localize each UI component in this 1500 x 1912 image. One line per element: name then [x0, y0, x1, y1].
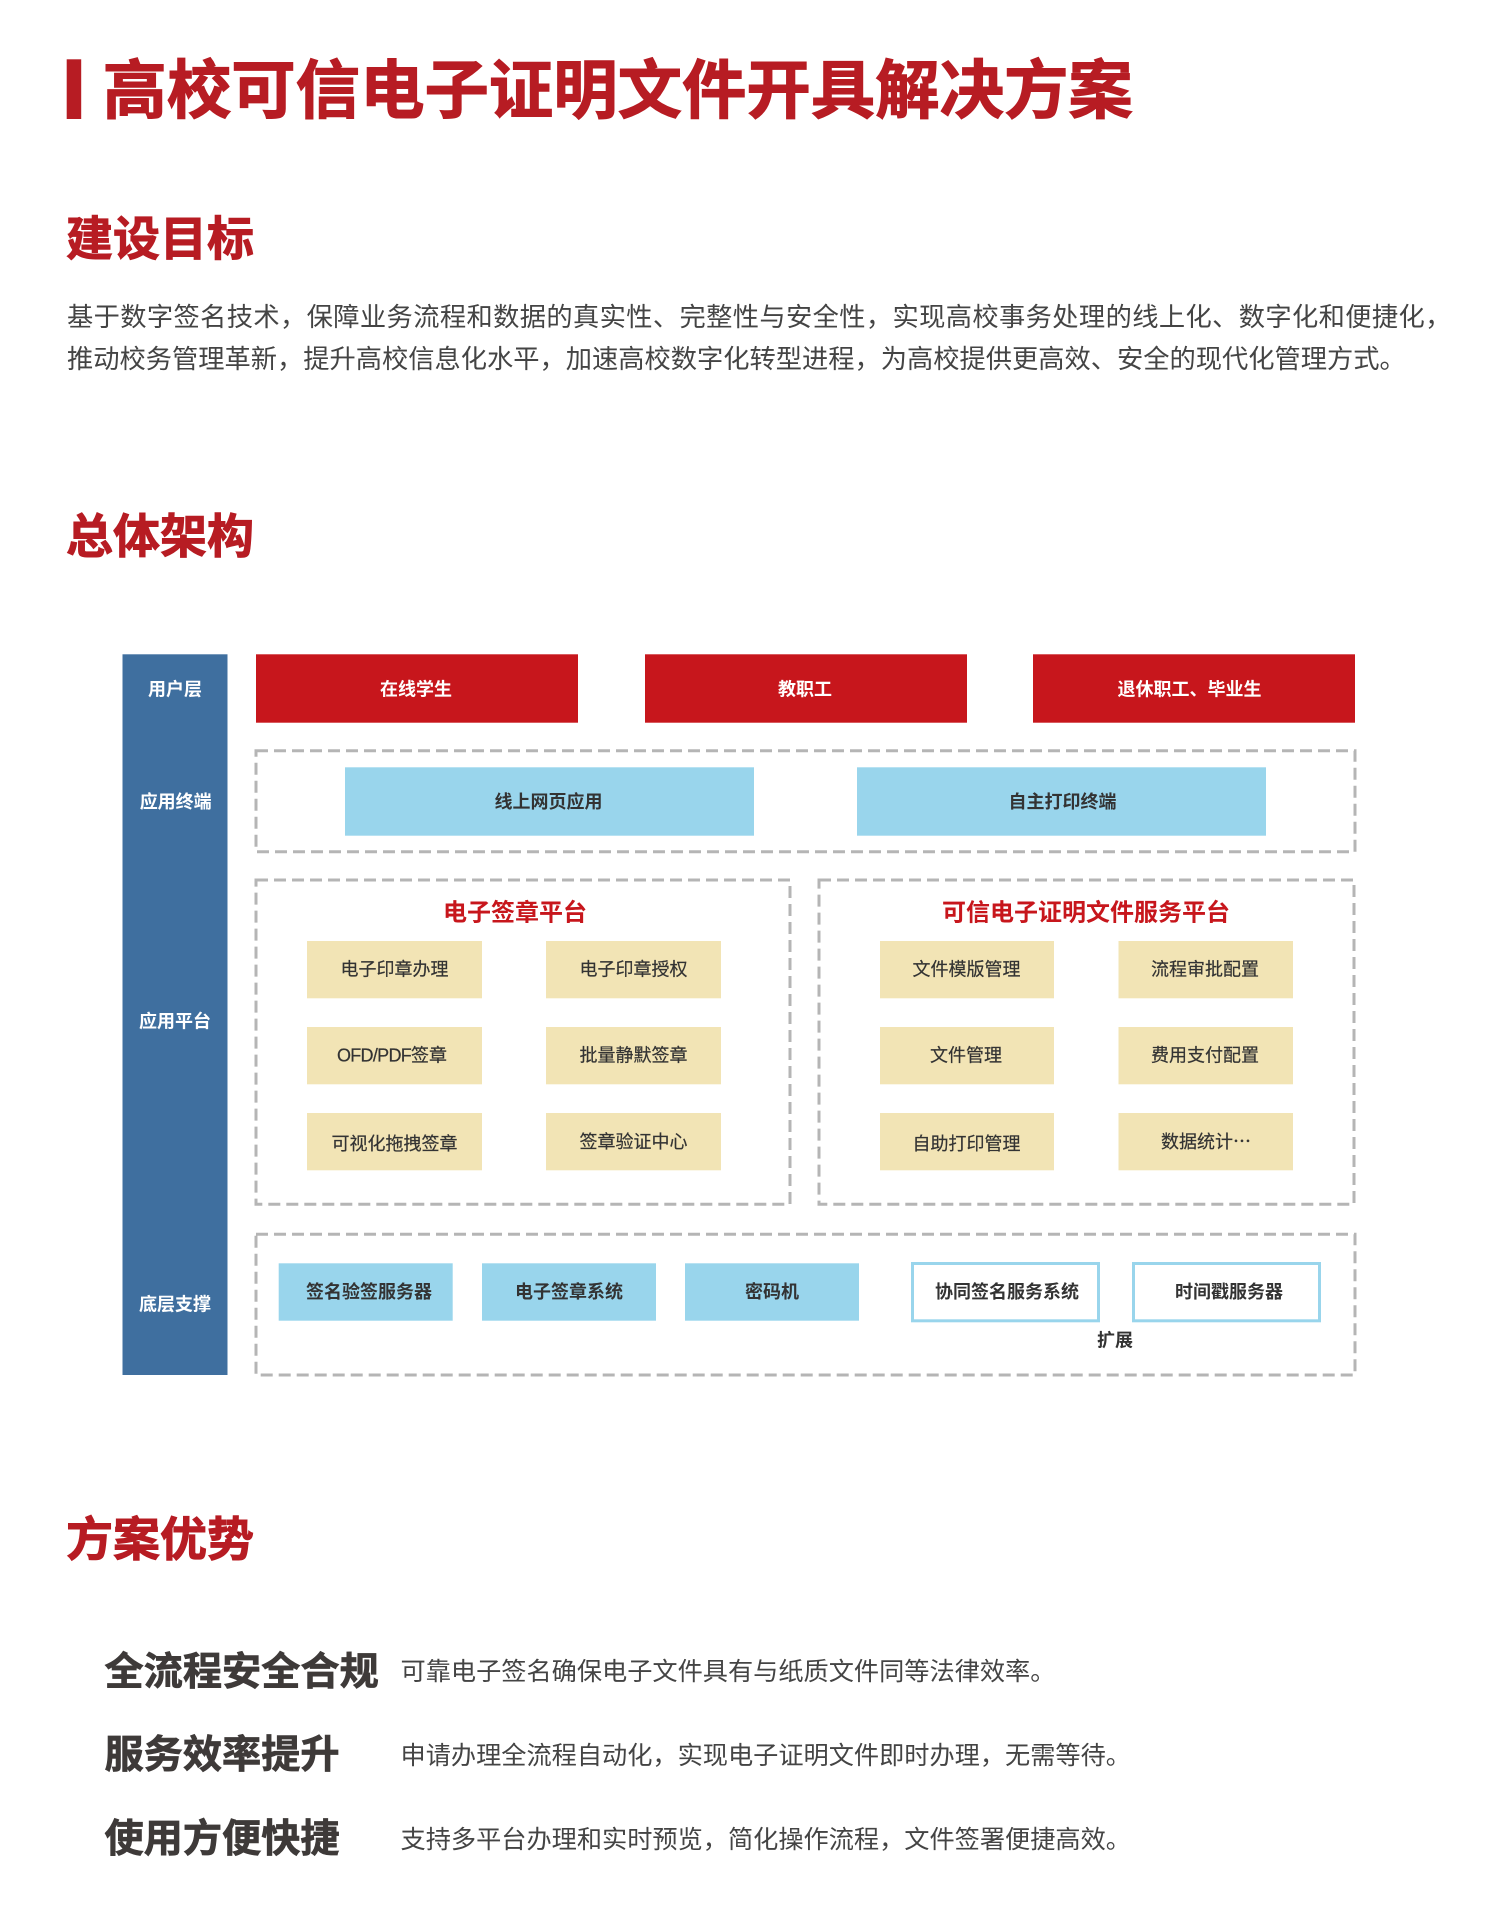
extension box: 时间戳服务器: 时间戳服务器 [1175, 1282, 1283, 1302]
item: 电子印章办理 [307, 941, 482, 998]
panel title: 可信电子证明文件服务平台 [942, 898, 1230, 926]
user box: 在线学生: 在线学生 [380, 678, 452, 700]
advantage: 全流程安全合规: 全流程安全合规 [104, 1651, 379, 1694]
user box: 教职工 [645, 654, 967, 723]
heading: 方案优势: 方案优势 [66, 1513, 254, 1566]
item: OFD/PDF签章 [307, 1027, 482, 1084]
item: 文件管理 [880, 1027, 1054, 1084]
user box: 退休职工、毕业生 [1033, 654, 1355, 723]
sidebar: layer labels: 应用终端 [140, 791, 212, 812]
item: 电子印章授权: 电子印章授权 [580, 960, 688, 980]
item: 费用支付配置 [1118, 1027, 1293, 1084]
item: 文件模版管理 [880, 941, 1054, 998]
panel: 可信电子证明文件服务平台 [819, 880, 1354, 1204]
advantage: 服务效率提升: 服务效率提升 [104, 1734, 340, 1777]
item: 批量静默签章 [546, 1027, 721, 1084]
text block: goals paragraph: 推动校务管理革新，提升高校信息化水平，加速高校数字化转型进程，为高校提供更高效、安全的现代化管理方式。 [67, 344, 1406, 374]
item: 文件模版管理: 文件模版管理 [912, 960, 1020, 980]
user box: 退休职工、毕业生: 退休职工、毕业生 [1118, 680, 1262, 700]
panel title: 电子签章平台 [443, 898, 587, 926]
sidebar: layer labels: 用户层 [148, 678, 202, 700]
terminal box: 自主打印终端: 自主打印终端 [1008, 792, 1116, 812]
advantage: 服务效率提升: 申请办理全流程自动化，实现电子证明文件即时办理，无需等待。 [400, 1742, 1131, 1770]
support box: 密码机: 密码机 [745, 1281, 799, 1302]
heading: 总体架构: 总体架构 [66, 510, 254, 563]
panel: 电子签章平台 [256, 880, 790, 1204]
item: 自助打印管理: 自助打印管理 [912, 1134, 1020, 1154]
item: 费用支付配置: 费用支付配置 [1151, 1046, 1259, 1066]
extension box: 协同签名服务系统 [912, 1264, 1098, 1321]
sidebar: layer labels: 应用平台 [139, 1010, 211, 1032]
user box: 教职工: 教职工 [778, 680, 832, 700]
panel: application terminals [256, 751, 1355, 852]
row: user layer [256, 654, 1355, 723]
item: 流程审批配置: 流程审批配置 [1151, 960, 1259, 980]
advantage: 服务效率提升 [104, 1734, 1131, 1777]
panel: architecture diagram [122, 654, 1355, 1375]
support box: 签名验签服务器: 签名验签服务器 [306, 1281, 432, 1302]
item: 数据统计…: 数据统计… [1161, 1128, 1251, 1154]
item: OFD/PDF签章: OFD/PDF签章 [337, 1046, 447, 1066]
support box: 电子签章系统: 电子签章系统 [515, 1281, 623, 1302]
sidebar: layer labels: 底层支撑 [139, 1294, 211, 1314]
item: 签章验证中心: 签章验证中心 [580, 1132, 688, 1152]
item: 自助打印管理 [880, 1113, 1054, 1170]
item: 批量静默签章: 批量静默签章 [580, 1046, 688, 1066]
advantage: 全流程安全合规: 可靠电子签名确保电子文件具有与纸质文件同等法律效率。 [400, 1658, 1055, 1686]
panel: base support [256, 1234, 1355, 1375]
terminal box: 线上网页应用 [345, 767, 754, 836]
support box: 电子签章系统 [482, 1263, 656, 1321]
item: 数据统计… [1118, 1113, 1293, 1170]
user box: 在线学生 [256, 654, 578, 723]
text block: goals paragraph: 基于数字签名技术，保障业务流程和数据的真实性、完整性与安全性，实现高校事务处理的线上化、数字化和便捷化， [67, 302, 1452, 332]
extension box: 时间戳服务器 [1134, 1264, 1320, 1321]
panel: advantages list [104, 1651, 1131, 1861]
support box: 密码机 [685, 1263, 859, 1321]
title: 高校可信电子证明文件开具解决方案 [102, 55, 1133, 127]
item: 可视化拖拽签章: 可视化拖拽签章 [332, 1134, 458, 1154]
item: 流程审批配置 [1118, 941, 1293, 998]
item: 电子印章办理: 电子印章办理 [340, 960, 448, 980]
item: 文件管理: 文件管理 [930, 1046, 1002, 1066]
item: 签章验证中心 [546, 1113, 721, 1170]
advantage: 使用方便快捷 [104, 1818, 1131, 1861]
advantage: 使用方便快捷: 支持多平台办理和实时预览，简化操作流程，文件签署便捷高效。 [400, 1826, 1131, 1854]
sidebar: layer labels [122, 654, 228, 1375]
item: 可视化拖拽签章 [307, 1113, 482, 1170]
advantage: 全流程安全合规 [104, 1651, 1055, 1694]
text block: goals paragraph [67, 302, 1452, 374]
label: 扩展: 扩展 [1097, 1330, 1133, 1350]
item: 电子印章授权 [546, 941, 721, 998]
terminal box: 自主打印终端 [857, 767, 1266, 836]
extension box: 协同签名服务系统: 协同签名服务系统 [935, 1281, 1079, 1302]
support box: 签名验签服务器 [279, 1263, 453, 1321]
terminal box: 线上网页应用: 线上网页应用 [494, 791, 602, 812]
advantage: 使用方便快捷: 使用方便快捷 [104, 1818, 340, 1861]
heading: 建设目标: 建设目标 [66, 212, 254, 266]
